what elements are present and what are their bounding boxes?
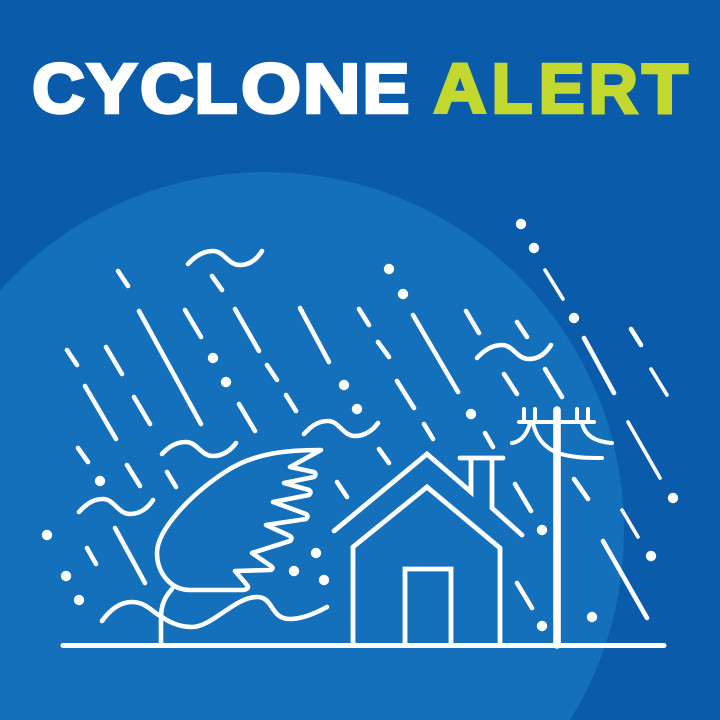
title word: ALERT: A [434,49,486,127]
title word: ALERT: L [492,49,532,127]
title word: CYCLONE: C [32,49,85,127]
title word: ALERT: E [539,49,584,127]
power pole [512,409,612,645]
title word: CYCLONE: C [140,49,194,127]
rain drops [42,219,678,631]
bent tree [102,450,327,643]
title word: CYCLONE: O [241,49,301,127]
rain streaks [67,270,667,618]
title word: CYCLONE: N [303,49,360,127]
title word: CYCLONE: E [363,49,409,127]
title [32,49,688,127]
house [334,454,522,645]
storm illustration [42,219,678,646]
title word: CYCLONE: Y [87,49,137,127]
title word: CYCLONE: L [195,49,237,127]
wind gusts [79,251,551,514]
title word: ALERT: R [589,49,638,127]
background circle [0,172,624,720]
title word: ALERT: T [642,49,688,127]
ground line [63,643,664,648]
